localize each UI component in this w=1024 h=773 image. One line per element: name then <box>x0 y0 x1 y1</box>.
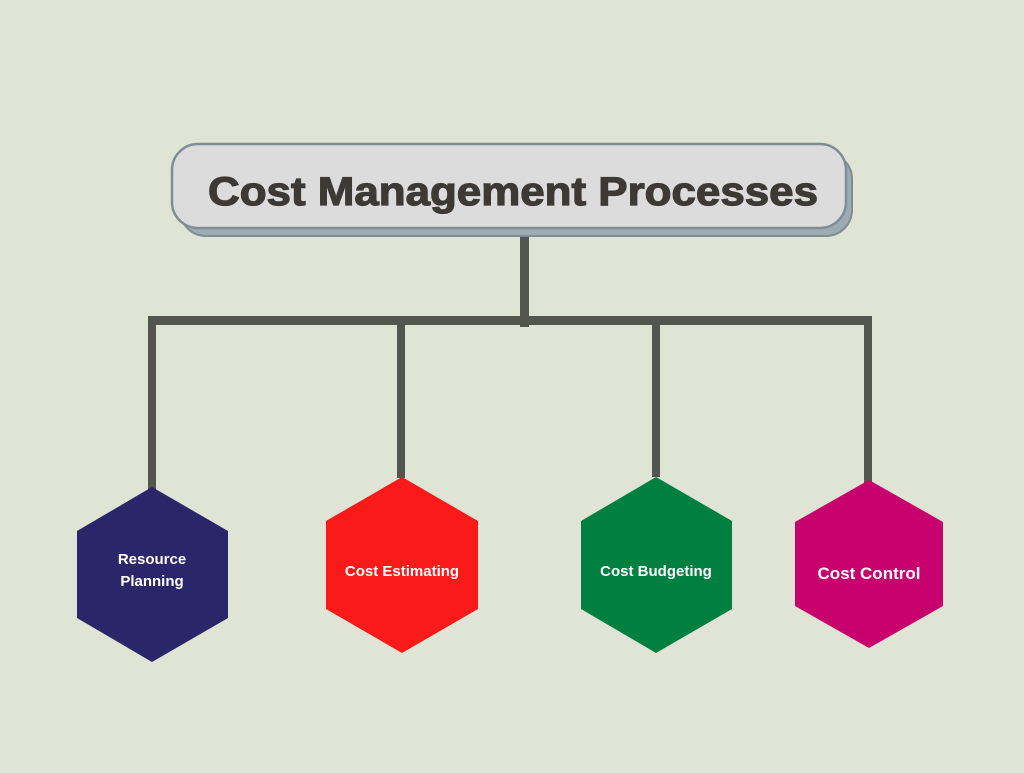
hexagon: Cost Budgeting: Cost Budgeting <box>600 563 712 580</box>
hexagon: Resource Planning <box>77 487 228 662</box>
title box <box>172 144 852 236</box>
hexagon: Resource Planning: Resource <box>118 551 186 568</box>
hexagon: Cost Control <box>795 480 943 648</box>
hexagon: Cost Budgeting <box>581 477 732 653</box>
hexagon: Cost Control: Cost Control <box>818 564 920 583</box>
hexagon: Cost Estimating: Cost Estimating <box>345 563 459 580</box>
hexagon: Cost Estimating <box>326 477 478 653</box>
connector tree <box>148 237 872 492</box>
title: Cost Management Processes <box>208 170 818 214</box>
hexagon: Resource Planning: Planning <box>120 573 184 590</box>
